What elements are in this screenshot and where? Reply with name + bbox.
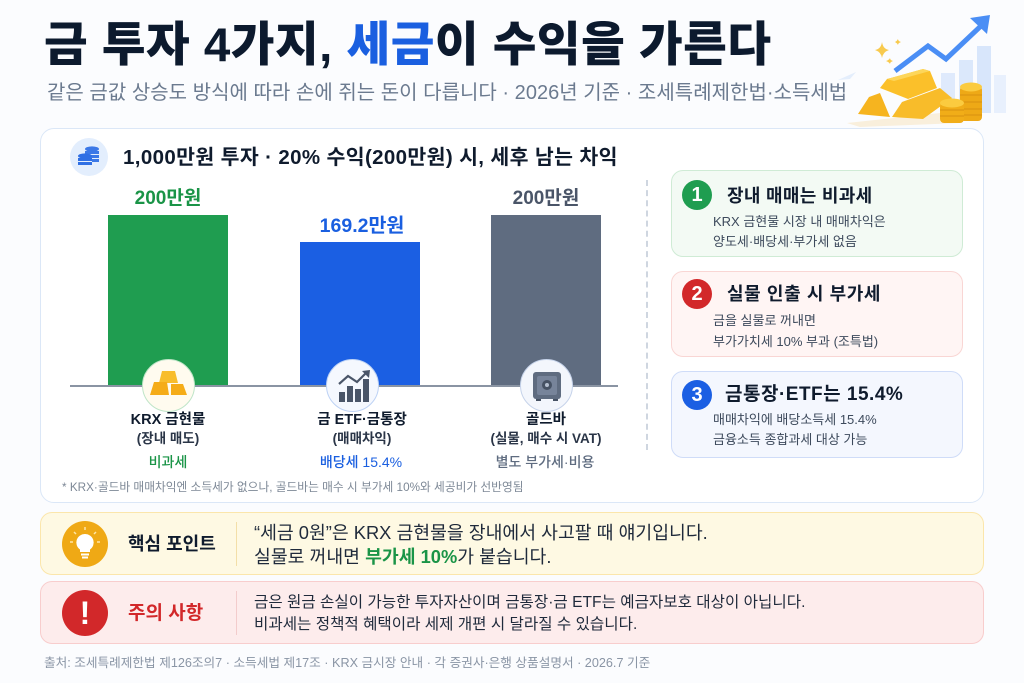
- number 3: [682, 380, 712, 410]
- subtitle: 같은 금값 상승도 방식에 따라 손에 쥐는 돈이 다릅니다 · 2026년 기준 · 조세특례제한법·소득세법: [47, 82, 847, 104]
- baseline: [70, 385, 618, 387]
- label: KRX sub: (장내 매도): [137, 431, 199, 446]
- key point text: “세금 0원”은 KRX 금현물을 장내에서 사고팔 때 얘기입니다.: [254, 522, 708, 543]
- bar: gold bar: [491, 215, 601, 386]
- number 3: 3: [691, 384, 703, 406]
- value: KRX: 200만원: [135, 188, 201, 209]
- key point text: [254, 522, 708, 567]
- card 2 text: 금을 실물로 꺼내면: [713, 313, 816, 328]
- card 3 heading: 금통장·ETF는 15.4%: [725, 384, 903, 405]
- chart heading: 1,000만원 투자 · 20% 수익(200만원) 시, 세후 남는 차익: [123, 146, 618, 169]
- number 2: 2: [691, 283, 703, 305]
- icon: growth chart: [326, 359, 379, 412]
- icon: gold bars with rising arrow: [838, 15, 1006, 127]
- label: gold bar: 골드바: [526, 412, 566, 428]
- card 3 text: 매매차익에 배당소득세 15.4%: [713, 412, 877, 427]
- card 3: [671, 371, 963, 458]
- panel: key point: [40, 512, 984, 575]
- label: ETF: 금 ETF·금통장: [317, 412, 407, 428]
- card 2: [671, 271, 963, 357]
- number 1: [682, 180, 712, 210]
- bar: ETF: [300, 242, 420, 386]
- tax: gold bar: 별도 부가세·비용: [496, 454, 594, 470]
- icon: safe: [520, 359, 573, 412]
- number 2: [682, 279, 712, 309]
- label: KRX: KRX 금현물: [131, 412, 205, 428]
- bar: KRX: [108, 215, 228, 386]
- card 1 text: 양도세·배당세·부가세 없음: [713, 234, 857, 249]
- value: gold bar: 200만원: [513, 188, 579, 209]
- panel: comparison: [40, 128, 984, 503]
- title: 금 투자 4가지, 세금이 수익을 가른다: [44, 19, 772, 72]
- warning text: [254, 594, 805, 633]
- icon: exclamation: [62, 590, 108, 636]
- card 3 text: [713, 412, 877, 447]
- dashed divider: [646, 180, 648, 450]
- key point text: 실물로 꺼내면 부가세 10%가 붙습니다.: [254, 546, 551, 567]
- tax: KRX: 비과세: [149, 454, 187, 470]
- label: gold bar sub: (실물, 매수 시 VAT): [490, 431, 602, 446]
- footnote: * KRX·골드바 매매차익엔 소득세가 없으나, 골드바는 매수 시 부가세 10%와 세공비가 선반영됨: [62, 481, 524, 494]
- card 3 text: 금융소득 종합과세 대상 가능: [713, 432, 867, 447]
- card 2 text: [713, 313, 878, 349]
- number 1: 1: [691, 184, 703, 206]
- warning label: 주의 사항: [128, 603, 203, 624]
- card 2 heading: 실물 인출 시 부가세: [727, 284, 881, 304]
- warning text: 비과세는 정책적 혜택이라 세제 개편 시 달라질 수 있습니다.: [254, 616, 637, 633]
- icon: exclamation: !: [80, 595, 90, 631]
- icon: coin stacks: [70, 138, 108, 176]
- icon: light bulb: [62, 521, 108, 567]
- card 1 heading: 장내 매매는 비과세: [727, 186, 872, 206]
- label: ETF sub: (매매차익): [333, 431, 391, 446]
- card 1: [671, 170, 963, 257]
- card 2 text: 부가가치세 10% 부과 (조특법): [713, 334, 878, 349]
- divider: [236, 522, 237, 566]
- source: 출처: 조세특례제한법 제126조의7 · 소득세법 제17조 · KRX 금시장 안내 · 각 증권사·은행 상품설명서 · 2026.7 기준: [44, 656, 650, 670]
- tax: ETF: 배당세 15.4%: [320, 454, 402, 470]
- card 1 text: KRX 금현물 시장 내 매매차익은: [713, 214, 886, 229]
- icon: gold: [142, 359, 195, 412]
- panel: warning: [40, 581, 984, 644]
- bar chart: [70, 188, 618, 470]
- value: ETF: 169.2만원: [320, 215, 404, 237]
- divider: [236, 591, 237, 635]
- warning text: 금은 원금 손실이 가능한 투자자산이며 금통장·금 ETF는 예금자보호 대상이 아닙니다.: [254, 594, 805, 611]
- key point label: 핵심 포인트: [128, 534, 216, 554]
- card 1 text: [713, 214, 886, 249]
